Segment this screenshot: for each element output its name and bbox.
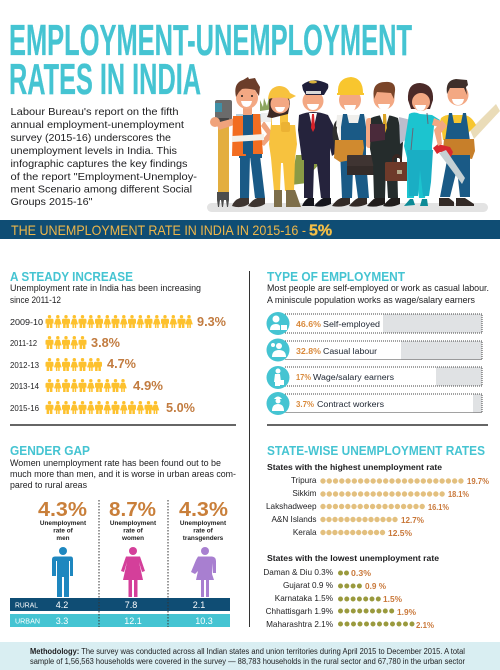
description: Most people are self-employed or work as casual labour. [267, 283, 489, 293]
urban values: 3.3 [56, 616, 68, 626]
column: men [38, 499, 87, 597]
bar: wage/salary earners [266, 366, 482, 389]
dot row: A&N Islands: 12.7% [401, 515, 424, 525]
worker: farmer [260, 86, 326, 207]
urban values [15, 616, 213, 626]
description: much more than men, and it is worse in urban areas com- [10, 469, 236, 479]
pictogram row 2013-14 [10, 379, 163, 393]
panel: state-wise unemployment rates [263, 443, 489, 630]
banner: headline rate [0, 220, 500, 240]
banner: headline rate: THE UNEMPLOYMENT RATE IN INDIA IN 2015-16 - [11, 222, 306, 238]
intro text block: unemployment levels in India. This [10, 146, 177, 157]
dot row: Daman & Diu: Daman & Diu 0.3% [263, 568, 333, 577]
pictogram row 2015-16 [10, 401, 195, 415]
column: women: rate of [123, 528, 144, 534]
bar: self-employed: 46.6% [296, 319, 321, 329]
column divider [249, 271, 250, 627]
subheading: highest: States with the highest unemployment rate [267, 462, 442, 472]
column: transgenders: Unemployment [180, 520, 227, 527]
urban values: URBAN [15, 618, 40, 626]
rural values: 2.1 [193, 600, 205, 610]
pictogram row 2012-13 [10, 357, 136, 371]
dot row: Gujarat: 0.9 % [365, 581, 386, 591]
column: men: 4.3% [38, 499, 87, 521]
dot row: Daman & Diu: 0.3% [351, 568, 371, 578]
rural values: 4.2 [56, 600, 68, 610]
rural values [15, 600, 205, 610]
pictogram row 2009-10: 2009-10 [10, 317, 43, 327]
pictogram row 2011-12: 2011-12 [10, 338, 37, 348]
methodology note: Methodology: The survey was conducted across all Indian states and union territories during April 2015 to December 2015. A total [30, 647, 465, 656]
column: men: Unemployment [40, 520, 87, 527]
dot row: Tripura [291, 476, 489, 486]
panel: a steady increase [10, 269, 226, 415]
dot row: Karnataka [275, 594, 402, 604]
pictogram row 2015-16: 2015-16 [10, 403, 39, 413]
description: A miniscule population works as wage/salary earners [267, 295, 475, 305]
column: women: Unemployment [110, 520, 157, 527]
banner: headline rate: 5% [309, 222, 332, 240]
pictogram row 2009-10 [10, 315, 226, 329]
worker: nurse [404, 83, 445, 206]
worker: businessman [367, 82, 414, 207]
dot row: Sikkim: Sikkim [292, 489, 317, 498]
intro text block: of the report "Employment-Unemploy- [10, 172, 197, 183]
column: women [109, 499, 157, 597]
bar: casual labour: Casual labour [323, 346, 377, 356]
bar: contract workers: 3.7% [296, 399, 314, 409]
intro text block: Labour Bureau's report on the fifth [10, 107, 179, 118]
dot row: Kerala: Kerala [293, 528, 317, 537]
dot row: Sikkim [292, 489, 469, 499]
rural values: RURAL [15, 602, 38, 610]
worker: carpenter [433, 79, 500, 206]
bar: casual labour: 32.8% [296, 346, 321, 356]
dot row: Lakshadweep: Lakshadweep [266, 502, 317, 511]
intro text block: ment Scenario among different Social [10, 184, 192, 196]
dot row: Lakshadweep [266, 502, 449, 512]
dot row: Gujarat [283, 581, 386, 591]
pictogram row 2012-13: 4.7% [107, 357, 136, 371]
title: RATES IN INDIA [9, 56, 201, 104]
rural values: 7.8 [125, 600, 137, 610]
urban row band [10, 614, 230, 627]
column: women: women [121, 535, 144, 542]
dot row: Tripura: Tripura [291, 476, 317, 485]
methodology note [0, 642, 500, 670]
description: since 2011-12 [10, 295, 61, 305]
heading: GENDER GAP [10, 443, 90, 458]
column: men: rate of [53, 528, 74, 534]
dot row: A&N Islands: A&N Islands [271, 515, 316, 524]
dot row: Kerala: 12.5% [388, 528, 412, 538]
intro text block: annual employment-unemployment [10, 120, 184, 131]
column: transgenders: transgenders [183, 535, 224, 542]
intro text block: Groups 2015-16" [10, 197, 93, 208]
bar: self-employed: Self-employed [323, 319, 380, 329]
panel: type of employment [266, 269, 489, 415]
bar: wage/salary earners: 17% [296, 372, 311, 382]
bar: self-employed [266, 312, 482, 335]
subheading: lowest: States with the lowest unemployment rate [267, 553, 439, 563]
description: Unemployment rate in India has been increasing [10, 283, 201, 293]
description [267, 283, 489, 305]
urban values: 12.1 [124, 616, 142, 626]
description [10, 283, 201, 305]
dot row: Tripura: 19.7% [467, 476, 489, 486]
dot row: Karnataka: Karnataka 1.5% [275, 594, 333, 603]
bar: contract workers: Contract workers [317, 399, 384, 409]
heading: A STEADY INCREASE [10, 269, 133, 284]
dot row: Daman & Diu [263, 568, 371, 578]
pictogram row 2013-14: 4.9% [133, 379, 163, 393]
title [9, 17, 412, 104]
dot row: Gujarat: Gujarat 0.9 % [283, 581, 333, 590]
bar: wage/salary earners: Wage/salary earners [313, 372, 394, 382]
intro text block: infographic captures the key findings [10, 159, 188, 170]
intro text block [10, 107, 197, 208]
column: transgenders: rate of [193, 528, 214, 534]
pictogram row 2009-10: 9.3% [197, 315, 226, 329]
dot row: Chhattisgarh [266, 607, 416, 617]
panel: gender gap [10, 443, 236, 627]
column: women: 8.7% [109, 499, 156, 521]
ground shadow [207, 203, 488, 212]
worker: builder [332, 77, 385, 207]
pictogram row 2012-13: 2012-13 [10, 360, 39, 370]
heading: TYPE OF EMPLOYMENT [267, 269, 405, 284]
pictogram row 2013-14: 2013-14 [10, 381, 39, 391]
dot row: Kerala [293, 528, 412, 538]
pictogram row 2011-12: 3.8% [91, 336, 120, 350]
dot row: A&N Islands [271, 515, 424, 525]
column: men: men [56, 535, 70, 542]
intro text block: survey (2015-16) underscores the [10, 133, 171, 144]
dot row: Maharashtra: 2.1% [416, 620, 434, 630]
heading: STATE-WISE UNEMPLOYMENT RATES [267, 443, 485, 458]
worker: pilot [298, 80, 336, 207]
dot row: Chhattisgarh: Chhattisgarh 1.9% [266, 607, 333, 616]
urban values: 10.3 [195, 616, 213, 626]
bar: casual labour [266, 338, 482, 362]
column: transgenders: 4.3% [179, 499, 228, 521]
rural row band [10, 598, 230, 611]
description: pared to rural areas [10, 480, 87, 490]
worker: surveyor [210, 77, 274, 207]
dot row: Sikkim: 18.1% [448, 489, 469, 499]
bar: contract workers [266, 392, 482, 415]
dot row: Maharashtra [266, 620, 434, 630]
pictogram row 2011-12 [10, 336, 120, 350]
pictogram row 2015-16: 5.0% [166, 401, 195, 415]
column: transgenders [179, 499, 228, 597]
description [10, 458, 236, 490]
methodology note: sample of 1,56,563 households were covered in the survey — 88,783 households in the rural sector and 67,780 in the urban sector [30, 657, 465, 666]
description: Women unemployment rate has been found out to be [10, 458, 221, 468]
dot row: Karnataka: 1.5% [383, 594, 402, 604]
dot row: Lakshadweep: 16.1% [428, 502, 449, 512]
dot row: Chhattisgarh: 1.9% [397, 607, 416, 617]
illustration: workers [207, 77, 500, 212]
dot row: Maharashtra: Maharashtra 2.1% [266, 620, 333, 629]
